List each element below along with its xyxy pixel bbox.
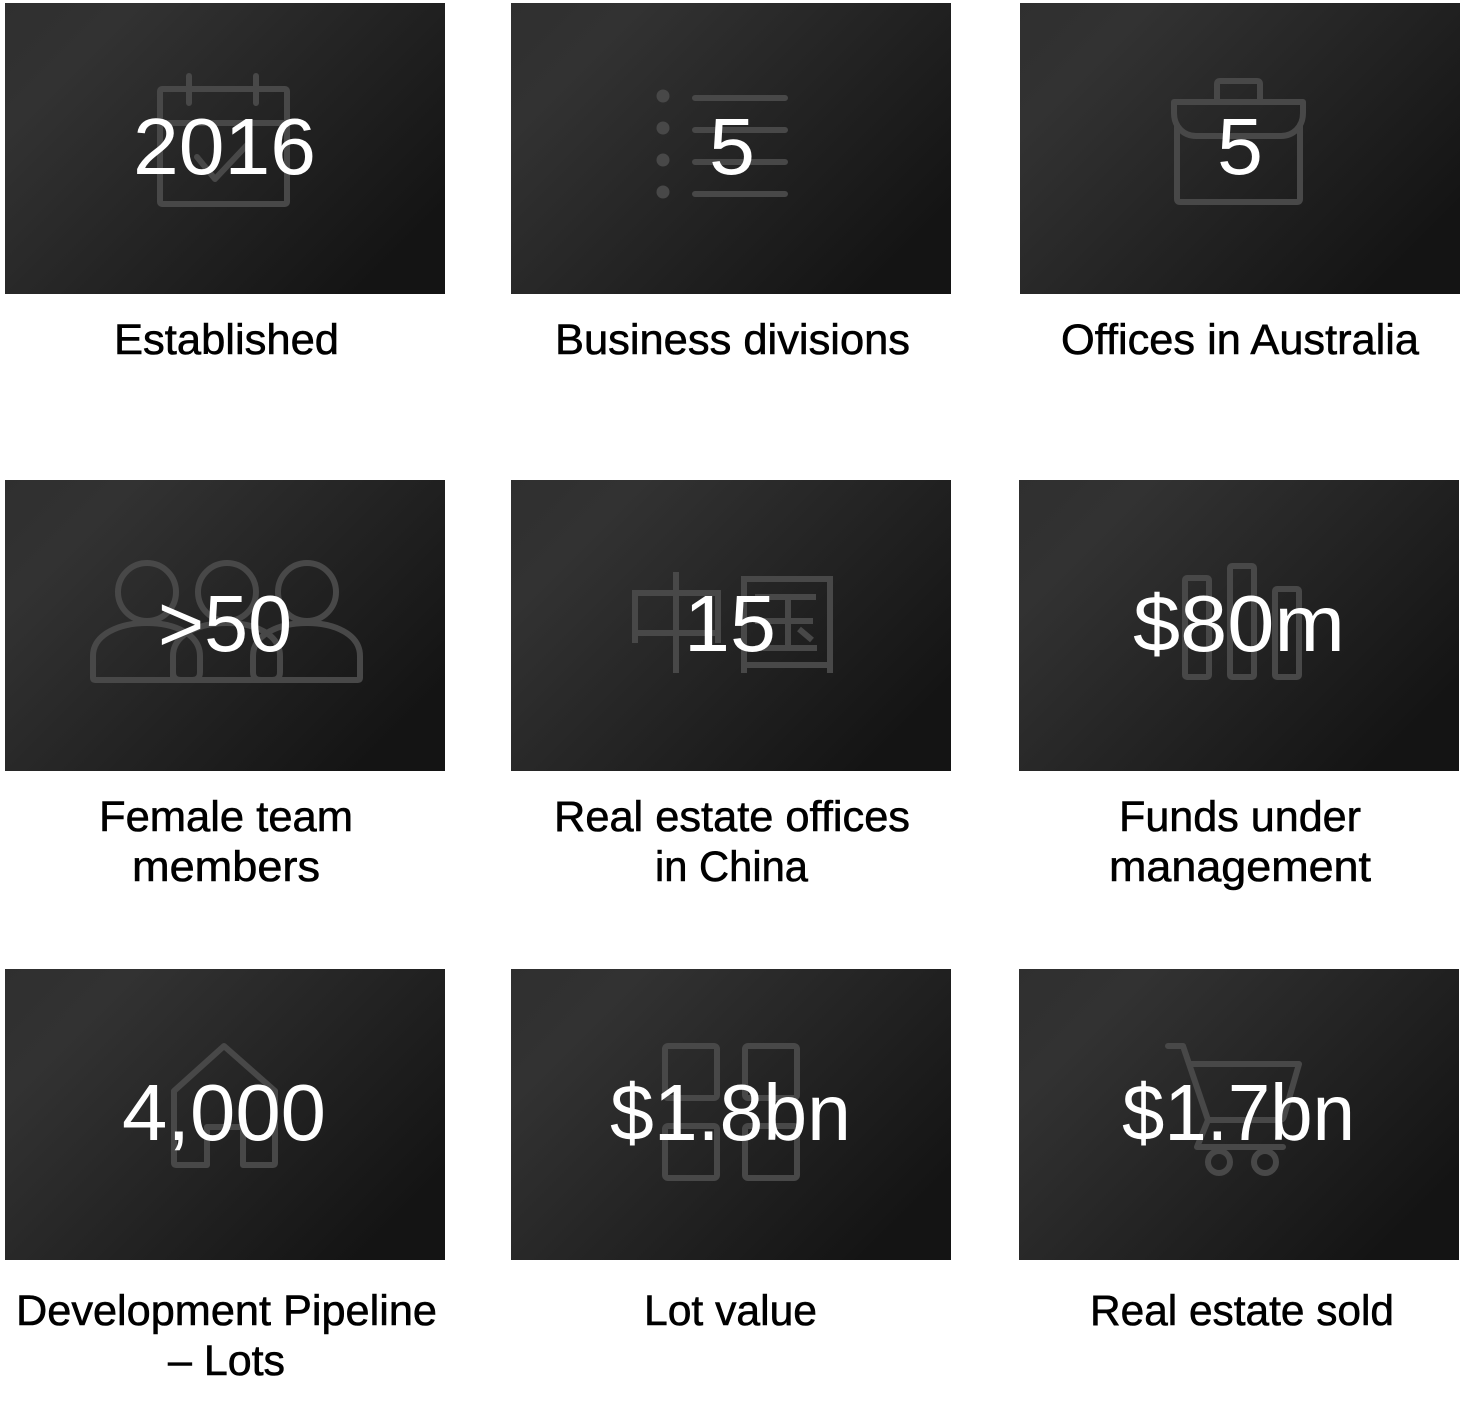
card background [1019,969,1459,1260]
label: development pipeline lots: – Lots [168,1337,285,1385]
card background [1020,3,1460,294]
label: female team members [99,793,353,891]
panel: development pipeline lots [5,969,445,1385]
label: development pipeline lots: Development Pipeline [16,1287,437,1335]
label: funds under management: management [1109,843,1371,891]
icon: three people [93,563,360,680]
icon: bar chart [1185,566,1299,677]
value: 5: 5 [709,102,755,191]
icon: shopping cart [1168,1046,1299,1173]
label: female team members: Female team [99,793,353,841]
panel: business divisions [511,3,951,364]
value: >50: >50 [158,579,292,668]
label: funds under management: Funds under [1119,793,1361,841]
icon: China characters [635,572,830,673]
value: 4,000: 4,000 [122,1068,326,1157]
panel: established [5,3,445,364]
card background [511,3,951,294]
icon: house [174,1046,275,1165]
panel: funds under management [1019,480,1459,891]
label: business divisions: Business divisions [555,316,910,364]
label: real estate offices in China [554,793,910,891]
panel: female team members [5,480,445,891]
label: offices in Australia: Offices in Australia [1061,316,1419,364]
label: lot value: Lot value [644,1287,817,1335]
label: development pipeline lots [16,1287,437,1385]
card background [5,3,445,294]
card background [5,969,445,1260]
panel: real estate offices in China [511,480,951,891]
value: $1.7bn: $1.7bn [1122,1068,1355,1157]
panel: real estate sold [1019,969,1459,1335]
label: real estate offices in China: Real estate offices [554,793,910,841]
label: real estate sold: Real estate sold [1090,1287,1394,1335]
label: real estate offices in China: in China [655,843,808,891]
panel: offices in Australia [1020,3,1460,364]
value: 15: 15 [684,579,776,668]
label: established: Established [114,316,339,364]
card background [1019,480,1459,771]
icon: briefcase [1174,81,1303,202]
card background [5,480,445,771]
label: funds under management [1109,793,1371,891]
icon: calendar [160,76,287,204]
value: 5: 5 [1217,102,1263,191]
card background [511,480,951,771]
card background [511,969,951,1260]
value: $80m: $80m [1133,579,1345,668]
value: 2016: 2016 [133,102,316,191]
value: $1.8bn: $1.8bn [610,1068,851,1157]
label: female team members: members [132,843,320,891]
panel: lot value [511,969,951,1335]
icon: list [656,90,785,198]
icon: four plots [665,1046,797,1178]
